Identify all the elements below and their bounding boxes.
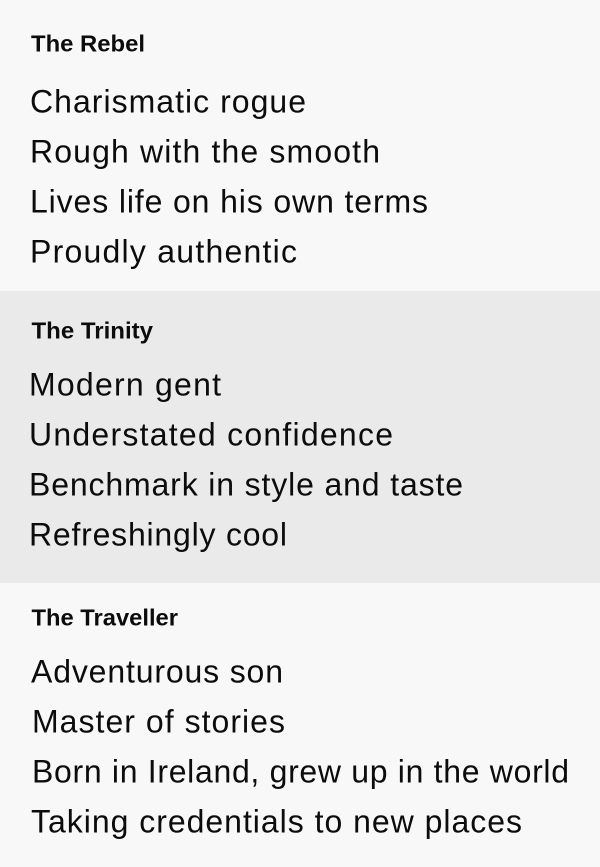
text: Master of stories: Master of stories: [32, 704, 285, 740]
heading: The Traveller: The Traveller: [32, 604, 178, 630]
text: Taking credentials to new places: Taking credentials to new places: [31, 804, 522, 840]
text: Modern gent: Modern gent: [29, 366, 221, 402]
text: Refreshingly cool: Refreshingly cool: [29, 516, 287, 552]
text: Rough with the smooth: Rough with the smooth: [30, 134, 380, 170]
heading: The Rebel: The Rebel: [31, 30, 145, 56]
panel: The Rebel: [0, 0, 600, 291]
text: Lives life on his own terms: Lives life on his own terms: [30, 184, 428, 220]
text: Proudly authentic: Proudly authentic: [30, 234, 297, 270]
text: Born in Ireland, grew up in the world: Born in Ireland, grew up in the world: [32, 754, 569, 790]
text: Charismatic rogue: Charismatic rogue: [30, 84, 306, 120]
text: Adventurous son: Adventurous son: [31, 654, 283, 690]
panel: The Traveller: [0, 583, 600, 867]
heading: The Trinity: The Trinity: [32, 318, 153, 344]
panel: The Trinity: [0, 291, 600, 583]
text: Understated confidence: Understated confidence: [29, 416, 393, 452]
text: Benchmark in style and taste: Benchmark in style and taste: [29, 466, 463, 502]
